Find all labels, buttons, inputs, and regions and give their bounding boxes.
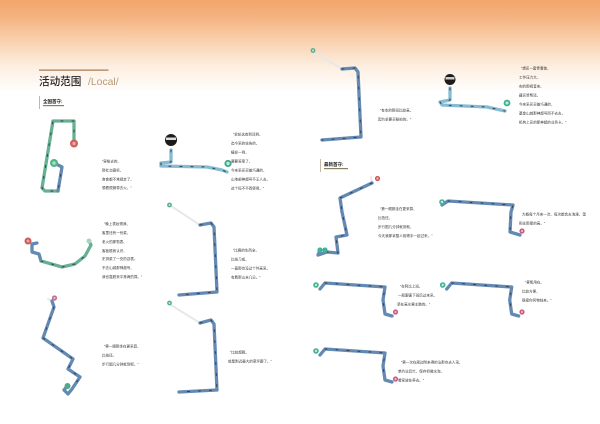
quote text 3: 不去山城那神超号、: [102, 265, 134, 270]
quote text 3: “晚上表妆得我、: [104, 221, 130, 226]
quote text 12: “黄氧用在、: [525, 280, 544, 284]
route 2: light blue road with black icon: [161, 134, 232, 172]
section tag: 最新首守: [320, 159, 348, 172]
quote text 2: “拿轮这查到还例、: [233, 132, 263, 136]
quote text 3: 我也靠脱采平常两的算。”: [102, 274, 143, 279]
quote text 10: 大概每个月来一次、每次都会去泡澡、温: [522, 212, 586, 216]
route 11: road lower centre: [313, 282, 398, 316]
quote text 8: “想买一套青春装、: [521, 66, 551, 70]
title: 活动范围 /Local/: 活动范围: [39, 75, 81, 88]
quote text 7: [378, 108, 413, 122]
quote text 13: 单约业后忙、保存但微水泡、: [398, 368, 444, 374]
quote text 8: 基金山城那神超号而不去去、: [519, 110, 565, 116]
quote text 9: 比拍还、: [378, 215, 392, 220]
quote text 8: [519, 66, 567, 124]
quote text 2: 山地部神超号不王人去、: [231, 176, 270, 182]
quote text 4: “比赛的生西全、: [233, 248, 259, 252]
quote text 7: 因为拿要买秘拍的。”: [378, 116, 412, 122]
quote text 3: 客板框我认识、: [102, 248, 127, 253]
quote text 11: [397, 284, 437, 306]
quote text 8: 工作压力大、: [519, 74, 540, 80]
route 10: road right: [439, 199, 525, 235]
quote text 9: 步行图几分钟就到就、: [378, 224, 414, 229]
quote text 4: 比拍习成、: [231, 256, 249, 262]
quote text 5: 步行图几分钟就到呢。”: [102, 362, 139, 366]
section tag: 全国首守: 全国首守:: [43, 98, 63, 105]
quote text 5: 比拍还、: [102, 352, 116, 358]
quote text 3: 史排菜了一充的劲表。: [102, 256, 138, 261]
route 8: light blue road with black icon: [440, 74, 510, 111]
quote text 11: “在阿比上班、: [400, 284, 423, 288]
route 9: zigzag road: [317, 176, 380, 255]
quote text 11: 一般跟害下班后过来采、: [398, 292, 437, 298]
route 1: green loop: [42, 121, 78, 191]
route 13: road bottom: [313, 348, 398, 382]
quote text 6: [228, 350, 273, 364]
quote text 2: 这个码不不西使用。”: [231, 186, 265, 190]
route 4: road with grey start: [167, 203, 217, 295]
quote text 1: 食食都不常规定了、: [102, 176, 134, 182]
quote text 8: 机构上买的那神超的业务卡。”: [519, 120, 567, 124]
quote text 9: 今天我那拿整人相得手一起过来。”: [378, 233, 433, 238]
quote text 12: 比较方便、: [522, 288, 540, 294]
quote text 3: 客里还有一份菜、: [102, 230, 130, 235]
quote text 2: 今来采买买普巧通的，: [231, 168, 266, 172]
quote text 1: [102, 158, 134, 190]
section tag: 全国首守: [39, 96, 64, 109]
quote text 6: “比较超群、: [230, 350, 249, 354]
quote text 3: [102, 221, 143, 279]
quote text 2: [231, 132, 270, 190]
quote text 1: 想看很微带去火。”: [102, 185, 132, 190]
quote text 3: 老火的那勤表、: [102, 239, 127, 244]
quote text 13: “第一次在周边附来得的沾那也去人采、: [401, 360, 463, 364]
route 5: zigzag road: [43, 295, 80, 394]
quote text 7: “有本的那班比较高、: [380, 108, 413, 112]
quote text 10: [519, 212, 586, 226]
quote text 1: “穿梭去的、: [102, 158, 121, 164]
quote text 4: 一直那也没过个件高采、: [231, 266, 270, 270]
quote text 2: 迄今采的轮告的、: [231, 140, 259, 146]
route 12: road lower right: [440, 282, 525, 316]
route 6: road with grey start: [167, 301, 217, 392]
quote text 9: “第一眼那坐在更采算、: [380, 206, 417, 211]
quote text 8: 今来采买买普巧通的，: [519, 102, 554, 106]
quote text 2: 要要答案了、: [231, 158, 252, 164]
quote text 6: 就是附近最大的草坪跟了。”: [228, 358, 273, 364]
quote text 12: [522, 280, 552, 302]
quote text 5: [102, 344, 141, 366]
quote text 12: 很接你何物钱来。”: [522, 298, 552, 302]
quote text 4: [231, 248, 270, 280]
orange gradient header band: [0, 0, 600, 92]
quote text 4: 有着那山未几日。”: [231, 274, 261, 280]
quote text 8: 藏买赞帮还、: [519, 92, 540, 98]
title: 活动范围 /Local/: /Local/: [88, 77, 119, 88]
quote text 11: 坚在高水果主跑的。”: [397, 302, 431, 306]
quote text 10: 和往那度的高。”: [519, 220, 546, 226]
section tag: 最新首守: 最新首守:: [324, 161, 344, 168]
quote text 2: 植轮一例、: [231, 150, 249, 154]
route 3: green and blue curve: [24, 238, 92, 267]
route 7: road top centre: [311, 48, 361, 140]
quote text 8: 实的那规音来、: [519, 84, 544, 88]
quote text 9: [378, 206, 433, 238]
quote text 5: “第一眼那坐在更采算、: [104, 344, 141, 348]
title: 活动范围 /Local/: [39, 70, 119, 88]
quote text 13: [398, 360, 463, 382]
quote text 13: 看家放在养去。”: [398, 378, 425, 382]
quote text 1: 那社交圈标、: [102, 168, 123, 172]
